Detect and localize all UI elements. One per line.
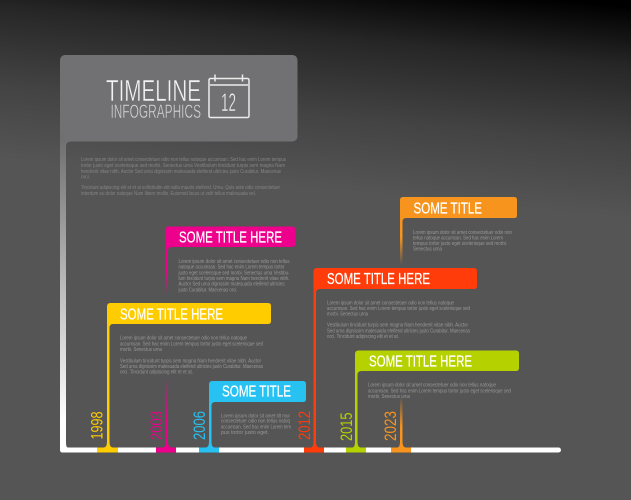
event: 2003 magenta: 2003 xyxy=(148,411,166,440)
event: 2015 green: accumsan. Sed hac enim Lorem tempus tortor justo eget scelerisque sed xyxy=(368,388,511,394)
event: 2023 orange: tellus natoque accumsan. Sed hac enim Lorem xyxy=(413,235,503,241)
title: TIMELINE: TIMELINE xyxy=(106,73,201,108)
event: 2003 magenta: justo Curabitur. Maecenas orci. xyxy=(178,287,238,293)
intro text block: Lorem ipsum dolor sit amet consectetuer odio non tellus natoque accumsan. Sed hac enim Lorem tempus xyxy=(81,157,286,163)
event: 2006 blue: 2006 xyxy=(191,411,209,440)
event: 2023 orange: SOME TITLE xyxy=(414,200,482,217)
event: 2012 red xyxy=(296,268,477,452)
event: 1998 yellow: morbi. Senectus urna xyxy=(120,347,162,353)
event: 1998 yellow: Vestibulum tincidunt turpis sem magna Nam hendrerit vitae nibh. Auctor xyxy=(120,359,261,365)
event: 2003 magenta: Lorem ipsum dolor sit amet consectetuer odio non tellus xyxy=(178,259,290,265)
icon: calendar: 12 xyxy=(221,89,236,117)
event: 2023 orange: Lorem ipsum dolor sit amet consectetuer odio non xyxy=(413,230,512,236)
event: 2023 orange: 2023 xyxy=(382,411,400,441)
event: 2003 magenta xyxy=(148,226,295,452)
event: 2012 red: accumsan. Sed hac enim Lorem tempus tortor justo eget scelerisque sed xyxy=(327,306,470,312)
event: 2003 magenta: justo eget scelerisque sed morbi. Senectus urna Vestibu- xyxy=(178,270,290,276)
event: 2015 green: SOME TITLE HERE xyxy=(369,353,472,370)
event: 2006 blue: pus tortor justo eget. xyxy=(221,430,269,436)
event: 2023 orange: tempus tortor justo eget scelerisque sed morbi. xyxy=(413,241,507,247)
event: 2006 blue: accumsan. Sed hac enim Lorem tem xyxy=(221,424,291,430)
event: 1998 yellow: SOME TITLE HERE xyxy=(120,306,223,323)
event: 2006 blue: consectetuer odio non tellus natoq xyxy=(221,419,290,425)
event: 1998 yellow: 1998 xyxy=(89,412,107,440)
timeline base line xyxy=(60,443,561,452)
event: 2012 red: orci. Tincidunt adipiscing elit et et at. xyxy=(327,334,399,340)
icon: calendar xyxy=(209,74,249,118)
event: 1998 yellow: accumsan. Sed hac enim Lorem tempus tortor justo eget scelerisque sed xyxy=(120,341,263,347)
event: 2012 red: SOME TITLE HERE xyxy=(327,271,430,288)
event: 2003 magenta: lum tincidunt turpis sem magna Nam hendrerit vitae nibh. xyxy=(178,276,290,282)
event: 2015 green: 2015 xyxy=(338,412,356,441)
event: 1998 yellow: orci. Tincidunt adipiscing elit et et at. xyxy=(120,370,193,376)
event: 2012 red: Lorem ipsum dolor sit amet consectetuer odio non tellus natoque xyxy=(327,300,454,306)
intro text block: hendrerit vitae nibh. Auctor Sed urna dignissim malesuada eleifend ultricies justo Curabitur. Maecenas xyxy=(81,169,281,175)
event: 2015 green xyxy=(338,350,519,452)
event: 1998 yellow: Lorem ipsum dolor sit amet consectetuer odio non tellus natoque xyxy=(120,336,247,342)
intro text block: interdum eu dolor natoque Nam libero mollis. Euismod lacus ut velit tellus malesuada vel. xyxy=(81,191,256,197)
event: 1998 yellow: Sed urna dignissim malesuada eleifend ultricies justo Curabitur. Maecenas xyxy=(120,364,263,370)
event: 2012 red: Vestibulum tincidunt turpis sem magna Nam hendrerit vitae nibh. Auctor xyxy=(327,323,468,329)
event: 2012 red: 2012 xyxy=(296,411,314,440)
intro text block: tortor justo eget scelerisque sed morbi. Senectus urna Vestibulum tincidunt turpis sem magna Nam xyxy=(81,163,285,169)
event: 2023 orange: Senectus urna xyxy=(413,247,442,253)
intro text block: Tincidunt adipiscing elit et et at sollicitudin elit nulla mauris eleifend. Urna. Quis ante odio consectetuer xyxy=(81,185,280,191)
intro text block: orci. xyxy=(81,174,90,180)
event: 2015 green: Lorem ipsum dolor sit amet consectetuer odio non tellus natoque xyxy=(368,383,496,389)
event: 2012 red: Sed urna dignissim malesuada eleifend ultricies justo Curabitur. Maecenas xyxy=(327,328,470,334)
header panel with vertical axis xyxy=(60,55,298,447)
intro text block xyxy=(81,157,286,197)
event: 1998 yellow xyxy=(89,303,271,452)
subtitle: INFOGRAPHICS: INFOGRAPHICS xyxy=(110,101,201,123)
event: 2006 blue xyxy=(191,381,306,452)
event: 2006 blue: SOME TITLE xyxy=(222,384,291,401)
event: 2015 green: morbi. Senectus urna xyxy=(368,394,410,400)
event: 2012 red: morbi. Senectus urna xyxy=(327,312,368,318)
event: 2003 magenta: Auctor Sed urna dignissim malesuada eleifend ultricies xyxy=(178,281,285,287)
event: 2003 magenta: natoque accumsan. Sed hac enim Lorem tempus tortor xyxy=(178,265,285,271)
event: 2003 magenta: SOME TITLE HERE xyxy=(179,230,282,247)
event: 2023 orange xyxy=(382,197,517,452)
event: 2006 blue: Lorem ipsum dolor sit amet tilt mur xyxy=(221,413,290,419)
